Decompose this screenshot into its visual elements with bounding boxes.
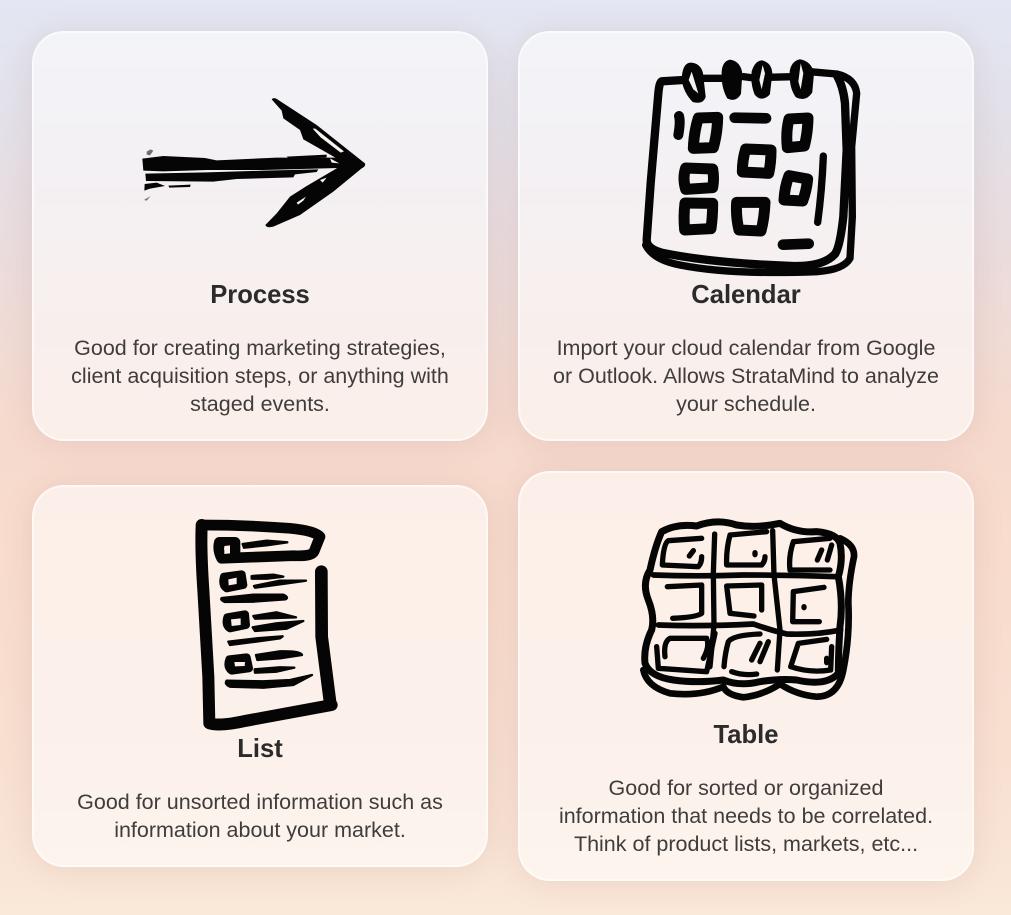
text: list description — [77, 790, 443, 842]
heading: Process: Process — [210, 281, 310, 309]
text: process description — [71, 336, 449, 416]
text: table description: Good for sorted or organized — [609, 776, 883, 800]
text: table description — [559, 776, 933, 856]
text: process description: client acquisition steps, or anything with — [71, 364, 449, 388]
text: process description: staged events. — [190, 392, 330, 416]
panel: process — [32, 31, 488, 441]
text: table description: Think of product lists, markets, etc... — [574, 832, 918, 856]
text: calendar description: or Outlook. Allows StrataMind to analyze — [553, 364, 939, 388]
panel: table — [518, 471, 974, 881]
panel: calendar — [518, 31, 974, 441]
heading: Table: Table — [714, 721, 778, 749]
text: list description: information about your market. — [114, 818, 406, 842]
text: calendar description — [553, 336, 939, 416]
text: calendar description: your schedule. — [676, 392, 816, 416]
text: list description: Good for unsorted information such as — [77, 790, 443, 814]
heading: Calendar: Calendar — [691, 281, 801, 309]
heading: List: List — [237, 735, 283, 763]
panel: list — [32, 485, 488, 867]
text: calendar description: Import your cloud calendar from Google — [557, 336, 935, 360]
text: process description: Good for creating marketing strategies, — [74, 336, 446, 360]
text: table description: information that needs to be correlated. — [559, 804, 933, 828]
